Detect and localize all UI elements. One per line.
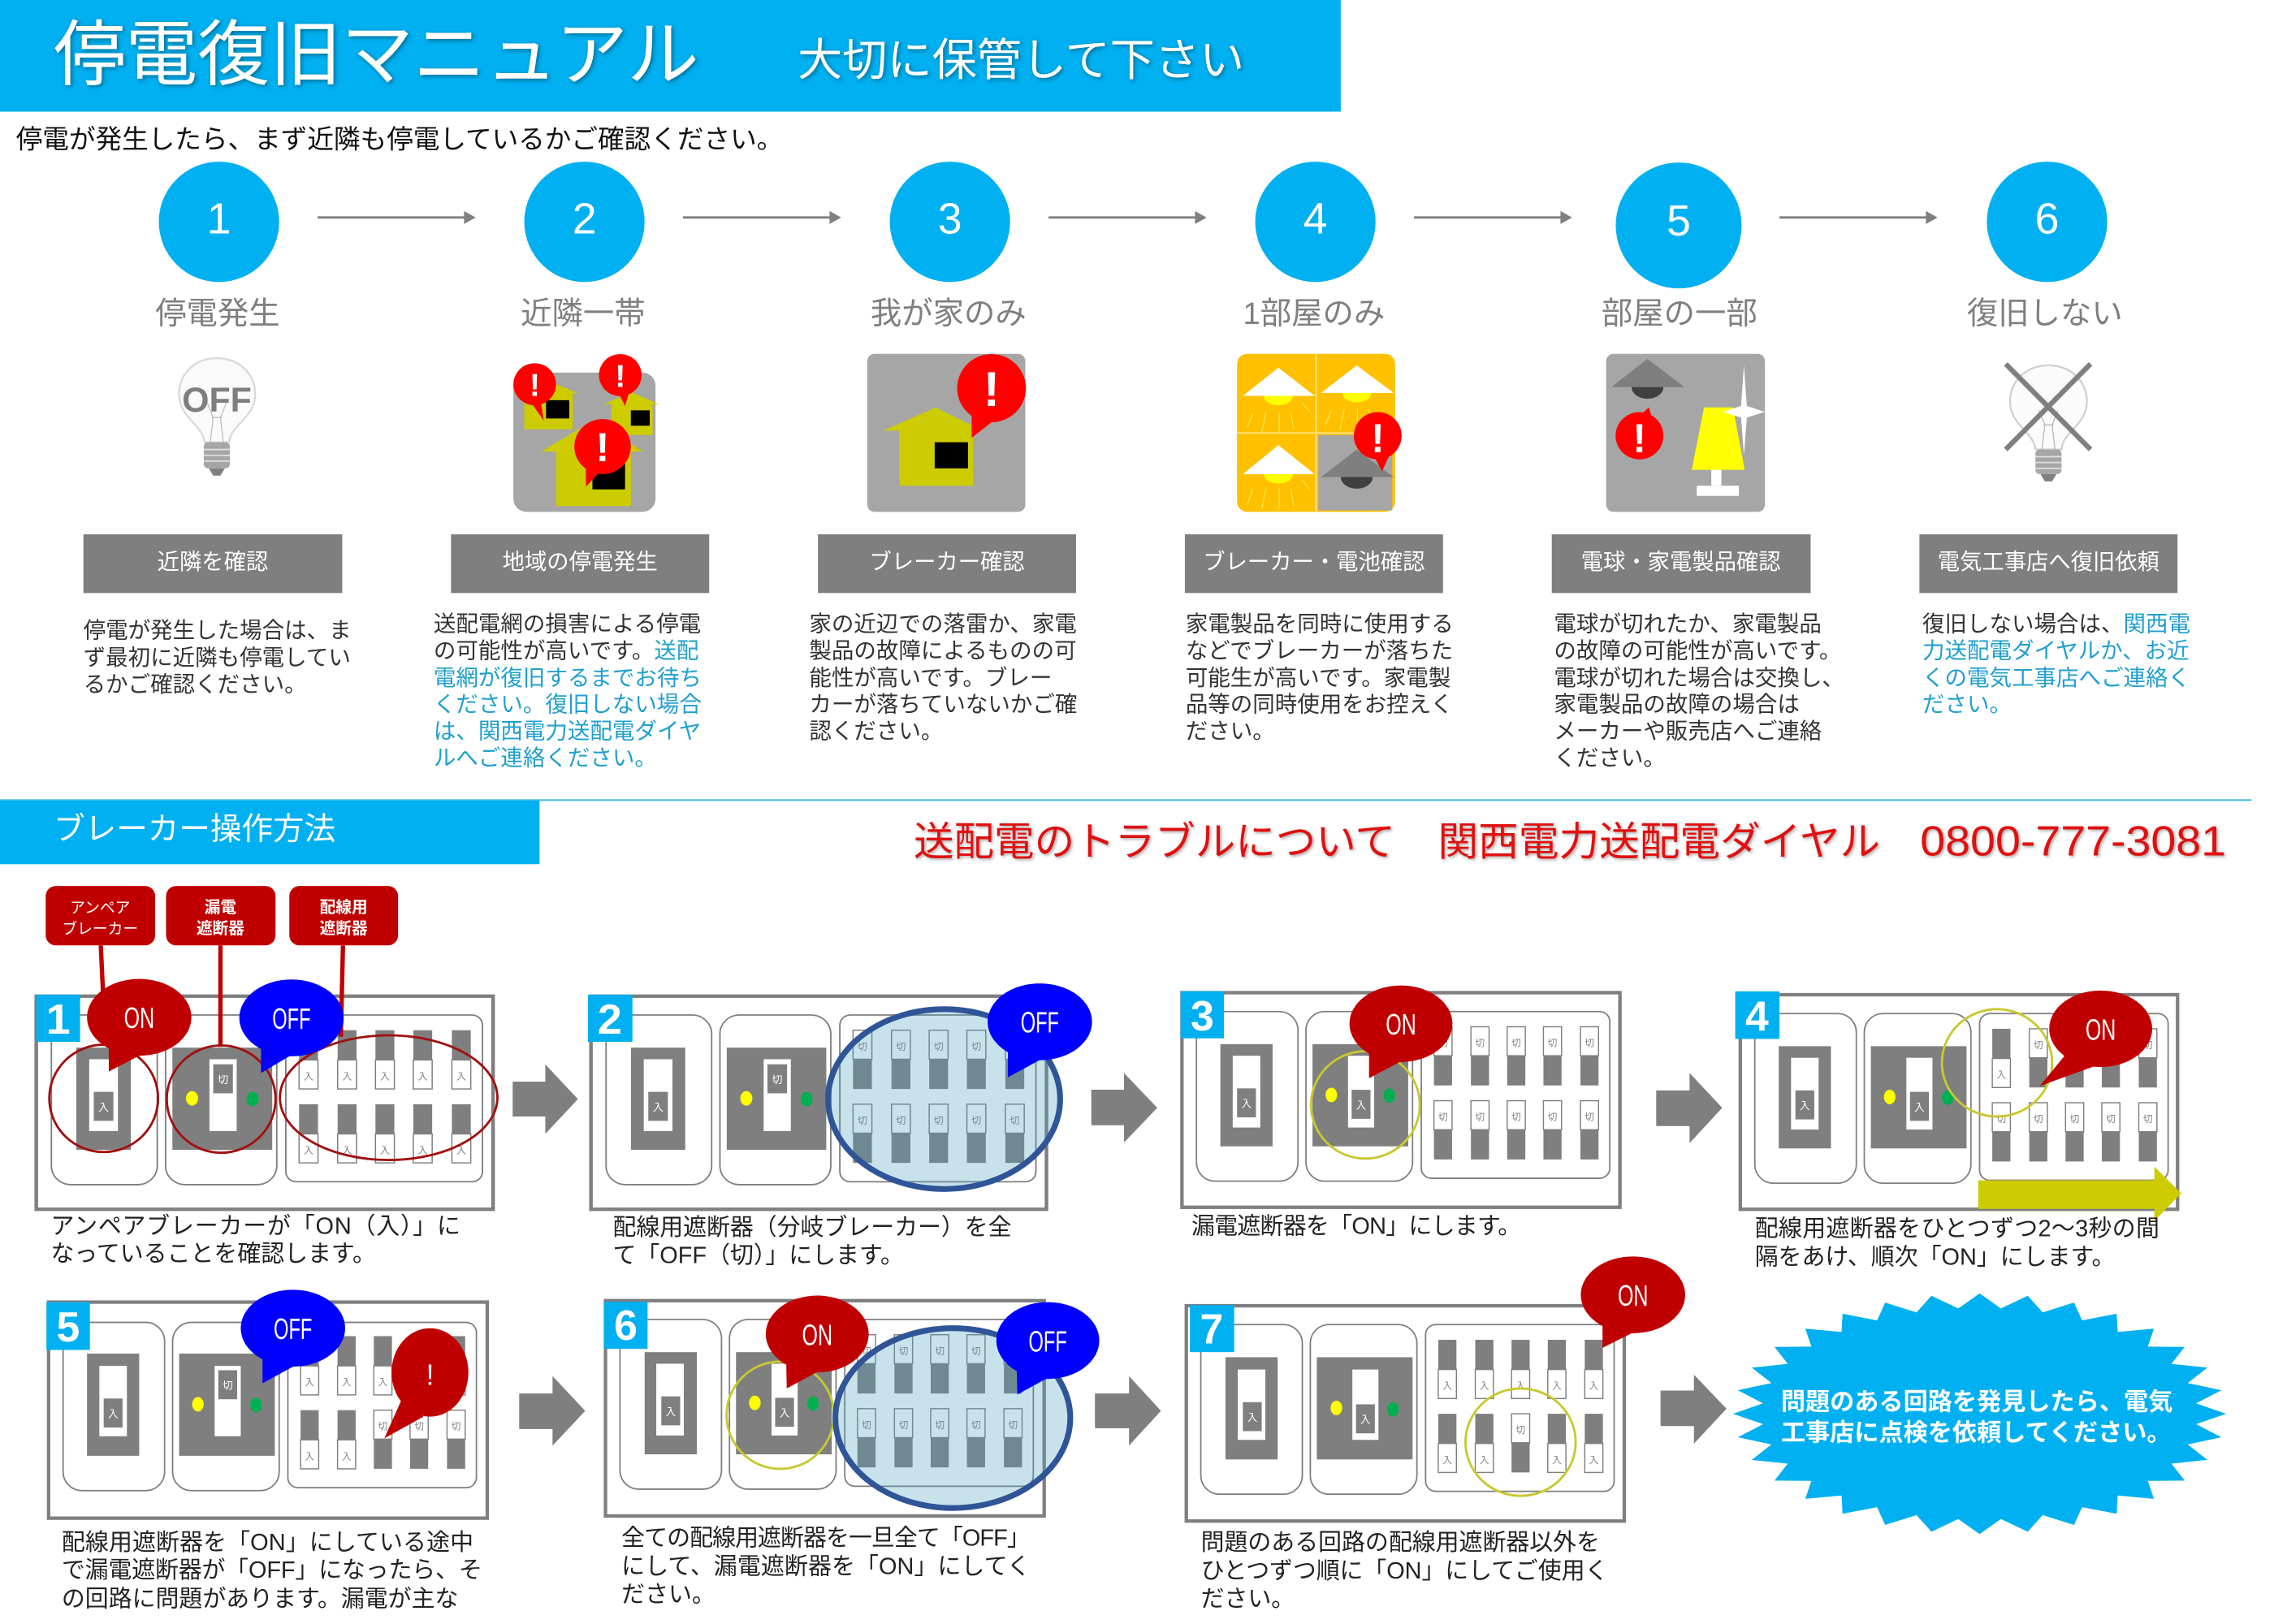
header banner	[0, 0, 1341, 112]
icon: own house outage: !	[984, 361, 1000, 417]
description 6	[1922, 611, 2190, 716]
panel: step 4: 入	[1996, 1070, 2006, 1081]
panel: step 1: 入	[342, 1071, 352, 1082]
panel: step 1: 1	[46, 996, 71, 1043]
panel: step 2: 切	[896, 1115, 906, 1126]
panel: step 6: 入	[666, 1406, 677, 1418]
step 5 circle: 5	[1667, 197, 1691, 245]
panel: step 7: 入	[1552, 1455, 1562, 1466]
panel: step 2: 切	[971, 1041, 981, 1052]
panel: step 1: 入	[98, 1101, 109, 1113]
panel: step 3: 切	[1511, 1039, 1521, 1049]
panel: step 1: 入	[304, 1145, 313, 1155]
panel: step 2: 切	[971, 1115, 981, 1126]
hotline banner: 送配電のトラブルについて	[914, 820, 1395, 865]
caption step 5	[62, 1530, 482, 1613]
action button 2	[451, 534, 709, 593]
panel: step 4: 切	[2070, 1040, 2079, 1051]
callout: problem alert	[384, 1328, 469, 1438]
arrow: step 2 to 3	[1092, 1073, 1157, 1142]
description 5: 電球が切れたか、家電製品	[1554, 611, 1822, 636]
label: earth leakage breaker	[166, 886, 275, 945]
action button 5: 電球・家電製品確認	[1581, 549, 1781, 574]
action button 4: ブレーカー・電池確認	[1203, 549, 1424, 574]
description 2: 電網が復旧するまでお待ち	[434, 665, 702, 690]
caption step 5: 配線用遮断器を「ON」にしている途中	[62, 1530, 473, 1556]
caption step 3: 漏電遮断器を「ON」にします。	[1191, 1214, 1521, 1240]
step 3 circle	[890, 162, 1010, 282]
description 3: 認ください。	[809, 719, 943, 744]
description 5: メーカーや販売店へご連絡	[1554, 719, 1822, 744]
callout: OFF step 2: OFF	[1021, 1006, 1059, 1039]
caption step 2: て「OFF（切）」にします。	[612, 1242, 904, 1268]
panel: step 1: 入	[417, 1071, 428, 1082]
callout: OFF step 1	[240, 979, 344, 1073]
description 6: ださい。	[1922, 691, 2012, 716]
caption step 1: アンペアブレーカーが「ON（入）」に	[50, 1214, 460, 1240]
callout: ON step 6: ON	[802, 1319, 832, 1351]
description 5: 家電製品の故障の場合は	[1554, 691, 1800, 716]
arrow: step 6 to 7	[1095, 1376, 1161, 1445]
label: ampere breaker	[45, 886, 155, 945]
callout: OFF step 1: OFF	[272, 1003, 311, 1035]
description 1	[84, 618, 352, 697]
callout: burst notice: 問題のある回路を発見したら、電気	[1781, 1389, 2172, 1416]
callout: OFF step 6	[996, 1302, 1100, 1394]
caption step 6: 全ての配線用遮断器を一旦全て「OFF」	[621, 1526, 1031, 1552]
panel: step 3: 切	[1476, 1039, 1485, 1049]
description 3: 能性が高いです。ブレー	[809, 665, 1052, 690]
callout: burst notice	[1733, 1294, 2226, 1534]
panel: step 5: 入	[342, 1451, 352, 1462]
step labels: 近隣一帯	[521, 296, 646, 331]
panel: step 5: 入	[452, 1377, 461, 1388]
step labels: 停電発生	[155, 296, 280, 331]
panel: step 1: 入	[304, 1071, 313, 1082]
step 1 circle: 1	[207, 196, 231, 244]
description 4: 家電製品を同時に使用する	[1186, 611, 1454, 636]
caption step 1	[50, 1214, 460, 1268]
step labels: 我が家のみ	[871, 296, 1027, 331]
action button 1: 近隣を確認	[158, 549, 268, 574]
step 5 circle	[1615, 162, 1741, 288]
icon: part of room outage	[1606, 354, 1765, 512]
panel: step 3: 入	[1242, 1099, 1252, 1110]
description 3: カーが落ちていないかご確	[809, 691, 1077, 716]
callout: ON step 3: ON	[1386, 1009, 1416, 1041]
label: wiring breaker: 配線用	[320, 899, 368, 917]
description 5	[1554, 611, 1844, 770]
description 4	[1186, 611, 1454, 744]
arrow: sequence direction	[1978, 1167, 2181, 1221]
subtitle: keep safe: 大切に保管して下さい	[798, 35, 1244, 85]
panel: step 2: 切	[934, 1115, 944, 1126]
panel: step 4: 入	[1914, 1102, 1925, 1113]
arrow 4 to 5	[1414, 211, 1572, 224]
panel: step 5: 切	[452, 1422, 460, 1432]
panel: step 5: 入	[305, 1451, 314, 1462]
step labels	[155, 296, 2123, 331]
callout: OFF step 2	[988, 983, 1092, 1078]
description 4: 品等の同時使用をお控えく	[1186, 691, 1453, 716]
panel: step 4: 切	[2070, 1114, 2079, 1125]
panel: step 5: 入	[378, 1377, 388, 1388]
panel: step 7: 切	[1516, 1425, 1525, 1436]
panel: step 4	[1736, 991, 2177, 1209]
panel: step 6: 切	[862, 1420, 871, 1431]
step 2 circle	[525, 162, 645, 282]
hotline banner: 0800-777-3081	[1920, 818, 2226, 865]
icon: crossed out bulb	[2006, 364, 2090, 482]
icon: neighbourhood outage: !	[530, 367, 540, 403]
description 5: ください。	[1554, 745, 1666, 770]
icon: own house outage	[867, 354, 1026, 512]
panel: step 1: 入	[342, 1145, 352, 1155]
panel: step 6: 切	[899, 1420, 908, 1431]
callout: ON step 3	[1350, 986, 1452, 1078]
panel: step 4: 切	[2034, 1114, 2043, 1125]
panel: step 2: 2	[598, 996, 622, 1043]
step labels: 1部屋のみ	[1243, 296, 1385, 331]
panel: step 5: 切	[378, 1422, 387, 1432]
hotline banner: 関西電力送配電ダイヤル	[1438, 820, 1880, 865]
description 4: 可能生が高いです。家電製	[1186, 665, 1450, 690]
icon: neighbourhood outage: !	[596, 425, 609, 470]
callout: ON step 7	[1580, 1256, 1685, 1348]
title: 停電復旧マニュアル	[54, 14, 699, 94]
action button 2: 地域の停電発生	[503, 549, 658, 574]
description 1: 停電が発生した場合は、ま	[84, 618, 352, 643]
label: earth leakage breaker: 遮断器	[197, 920, 244, 938]
description 2: 送配電網の損害による停電	[434, 611, 701, 636]
panel: step 4: 切	[2106, 1114, 2116, 1125]
action button 4	[1185, 534, 1443, 593]
panel: step 3: 入	[1356, 1099, 1367, 1111]
caption step 6: にして、漏電遮断器を「ON」にしてく	[621, 1554, 1031, 1580]
description 6: 力送配電ダイヤルか、お近	[1922, 638, 2190, 663]
caption step 6: ださい。	[621, 1582, 715, 1608]
arrow: step 5 to 6	[519, 1376, 586, 1445]
caption step 5: で漏電遮断器が「OFF」になったら、そ	[62, 1557, 482, 1583]
panel: step 4: 切	[1996, 1114, 2006, 1125]
panel: step 1: 入	[380, 1071, 390, 1082]
caption step 5: の回路に問題があります。漏電が主な	[62, 1587, 458, 1613]
panel: step 1: 入	[456, 1145, 466, 1155]
caption step 7: ださい。	[1201, 1587, 1295, 1613]
label: ampere breaker: ブレーカー	[62, 919, 138, 937]
panel: step 6	[604, 1301, 1044, 1516]
step 4 circle: 4	[1303, 196, 1328, 244]
description 2: は、関西電力送配電ダイヤ	[434, 719, 701, 744]
icon: neighbourhood outage	[513, 354, 659, 512]
panel: step 6: 切	[971, 1346, 981, 1357]
panel: step 4: 切	[2106, 1040, 2116, 1051]
callout: burst notice: 工事店に点検を依頼してください。	[1781, 1419, 2172, 1447]
panel: step 4: 入	[1800, 1100, 1810, 1112]
hotline banner	[914, 818, 2226, 865]
arrow 3 to 4	[1048, 211, 1207, 224]
highlight: wiring breakers step 2	[828, 1009, 1060, 1189]
description 2: ください。復旧しない場合	[434, 691, 702, 716]
panel: step 7: 入	[1516, 1381, 1526, 1392]
description 1: るかご確認ください。	[84, 672, 307, 697]
label: earth leakage breaker: 漏電	[205, 899, 236, 917]
panel: step 1: 入	[380, 1145, 390, 1155]
description 1: ず最初に近隣も停電してい	[84, 645, 351, 670]
description 2	[434, 611, 702, 770]
panel: step 6: 6	[614, 1302, 638, 1349]
panel: step 2: 切	[1009, 1041, 1020, 1052]
panel: step 7	[1187, 1305, 1624, 1521]
panel: step 1: 入	[456, 1071, 466, 1082]
label: ampere breaker: アンペア	[70, 899, 130, 916]
caption step 6	[621, 1526, 1031, 1608]
panel: step 6: 切	[1009, 1346, 1018, 1357]
icon: part of room outage: !	[1632, 416, 1646, 461]
panel: step 2: 切	[934, 1041, 944, 1052]
arrow: step 1 to 2	[512, 1065, 578, 1134]
panel: step 1	[37, 995, 493, 1209]
description 5: の故障の可能性が高いです。	[1554, 638, 1841, 663]
panel: step 7: 入	[1552, 1381, 1562, 1392]
connector: ampere breaker	[101, 945, 103, 991]
caption step 7	[1201, 1530, 1608, 1613]
panel: step 3: 切	[1511, 1112, 1521, 1123]
panel: step 7: 入	[1247, 1412, 1258, 1423]
panel: step 7: 7	[1200, 1305, 1223, 1352]
panel: step 4: 切	[2034, 1040, 2043, 1051]
panel: step 3: 切	[1438, 1039, 1448, 1049]
panel: step 7: 入	[1589, 1455, 1599, 1466]
panel: step 5: 入	[305, 1377, 314, 1388]
action button 6	[1919, 534, 2177, 593]
panel: step 3: 切	[1548, 1039, 1557, 1049]
step labels: 部屋の一部	[1602, 296, 1757, 331]
action button 6: 電気工事店へ復旧依頼	[1938, 549, 2159, 574]
arrow: step 7 to notice	[1661, 1375, 1727, 1444]
panel: step 6: 切	[899, 1346, 908, 1357]
panel: step 1: 入	[417, 1145, 428, 1155]
callout: ON step 4	[2040, 991, 2152, 1086]
panel: step 7: 入	[1589, 1381, 1599, 1392]
callout: ON step 1: ON	[124, 1002, 154, 1034]
panel: step 2	[588, 995, 1047, 1209]
icon: one room outage: !	[1371, 416, 1385, 461]
panel: step 3: 切	[1584, 1039, 1594, 1049]
icon: one room outage	[1237, 354, 1402, 512]
panel: step 7: 入	[1480, 1381, 1489, 1392]
caption step 4	[1755, 1216, 2159, 1271]
callout: OFF step 6: OFF	[1029, 1325, 1067, 1358]
panel: step 2: 切	[1009, 1115, 1020, 1126]
intro sentence: 停電が発生したら、まず近隣も停電しているかご確認ください。	[16, 125, 783, 154]
panel: step 5: 入	[108, 1409, 119, 1420]
panel: step 6: 切	[935, 1420, 945, 1431]
icon: light bulb off: OFF	[182, 381, 252, 420]
panel: step 4: 4	[1745, 993, 1769, 1040]
action button 3: ブレーカー確認	[869, 549, 1025, 574]
panel: step 2: 切	[896, 1041, 906, 1052]
panel: step 2: 切	[858, 1115, 867, 1126]
label: wiring breaker: 遮断器	[320, 920, 368, 938]
step 6 circle: 6	[2035, 196, 2059, 244]
panel: step 6: 切	[971, 1420, 981, 1431]
description 6: 復旧しない場合は、関西電	[1922, 611, 2190, 637]
panel: step 7: 入	[1480, 1455, 1489, 1466]
panel: step 5: 切	[414, 1422, 424, 1432]
panel: step 7: 入	[1442, 1455, 1452, 1466]
step 2 circle: 2	[573, 196, 597, 244]
description 4: ださい。	[1186, 719, 1275, 744]
action button 3	[818, 534, 1076, 593]
step labels: 復旧しない	[1967, 296, 2123, 331]
caption step 4: 隔をあけ、順次「ON」にします。	[1755, 1245, 2115, 1271]
description 3: 製品の故障によるものの可	[809, 638, 1077, 663]
highlight ring step 7	[1465, 1389, 1576, 1496]
panel: step 2: 入	[653, 1101, 664, 1113]
callout: ON step 4: ON	[2086, 1013, 2116, 1046]
panel: step 6: 入	[780, 1408, 790, 1419]
callout: ON step 6	[766, 1296, 869, 1389]
caption step 7: ひとつずつ順に「ON」にしてご使用く	[1201, 1558, 1608, 1584]
panel: step 7: 入	[1360, 1415, 1371, 1426]
panel: step 5: 入	[414, 1377, 424, 1388]
highlight ring step 6	[727, 1362, 834, 1469]
panel: step 6: 切	[935, 1346, 945, 1357]
icon: light bulb off	[179, 358, 255, 476]
step 1 circle	[159, 162, 279, 282]
panel: step 2: 切	[858, 1041, 867, 1052]
highlight ring step 3	[1311, 1052, 1420, 1159]
panel: step 4: 切	[2143, 1040, 2152, 1051]
arrow: step 3 to 4	[1656, 1073, 1723, 1143]
panel: step 1: 切	[218, 1073, 228, 1086]
callout: OFF step 5: OFF	[274, 1313, 312, 1345]
panel: step 7: 入	[1442, 1381, 1452, 1392]
highlight rings step 1	[50, 1035, 497, 1160]
action button 5	[1552, 534, 1810, 593]
connector: wiring breaker	[341, 945, 343, 1037]
arrow 5 to 6	[1779, 211, 1938, 224]
icon: neighbourhood outage: !	[615, 358, 625, 394]
caption step 2	[612, 1215, 1012, 1268]
connector: earth leakage breaker	[219, 945, 222, 1047]
panel: step 5: 5	[57, 1303, 80, 1350]
panel: step 2: 切	[772, 1073, 783, 1086]
caption step 1: なっていることを確認します。	[50, 1242, 376, 1268]
label: wiring breaker	[289, 886, 398, 945]
panel: step 4: 切	[2143, 1114, 2152, 1125]
panel: step 5: 入	[342, 1377, 352, 1388]
step 3 circle: 3	[938, 196, 962, 244]
arrow 2 to 3	[683, 211, 841, 224]
callout: ON step 1	[87, 979, 192, 1072]
panel: step 3: 切	[1476, 1112, 1485, 1123]
panel: step 6: 切	[1009, 1420, 1018, 1431]
highlight ring step 4	[1942, 1009, 2052, 1116]
step 4 circle	[1256, 162, 1376, 282]
callout: ON step 7: ON	[1618, 1280, 1648, 1312]
description 5: 電球が切れた場合は交換し、	[1554, 665, 1844, 690]
description 4: などでブレーカーが落ちた	[1186, 638, 1453, 663]
description 2: の可能性が高いです。送配	[434, 638, 698, 663]
description 3	[809, 611, 1077, 744]
step 6 circle	[1987, 162, 2108, 282]
section heading: breaker operation: ブレーカー操作方法	[54, 812, 335, 847]
caption step 7: 問題のある回路の配線用遮断器以外を	[1201, 1530, 1600, 1556]
panel: step 5: 切	[223, 1380, 233, 1392]
panel: step 3: 3	[1191, 992, 1214, 1039]
section heading: breaker operation	[0, 801, 539, 864]
arrow 1 to 2	[318, 211, 476, 224]
description 6: くの電気工事店へご連絡く	[1922, 665, 2190, 690]
highlight: wiring breakers step 6	[836, 1328, 1070, 1508]
callout: OFF step 5	[240, 1289, 345, 1384]
callout: problem alert: !	[426, 1358, 434, 1391]
panel: step 3: 切	[1548, 1112, 1557, 1123]
panel: step 5	[46, 1302, 487, 1518]
panel: step 3: 切	[1438, 1112, 1448, 1123]
caption step 4: 配線用遮断器をひとつずつ2〜3秒の間	[1755, 1216, 2159, 1242]
panel: step 3	[1181, 991, 1620, 1207]
action button 1	[84, 534, 342, 593]
description 2: ルへご連絡ください。	[434, 745, 657, 770]
panel: step 3: 切	[1584, 1112, 1594, 1123]
description 3: 家の近辺での落雷か、家電	[809, 611, 1077, 636]
caption step 2: 配線用遮断器（分岐ブレーカー）を全	[612, 1215, 1012, 1241]
panel: step 6: 切	[862, 1346, 871, 1357]
